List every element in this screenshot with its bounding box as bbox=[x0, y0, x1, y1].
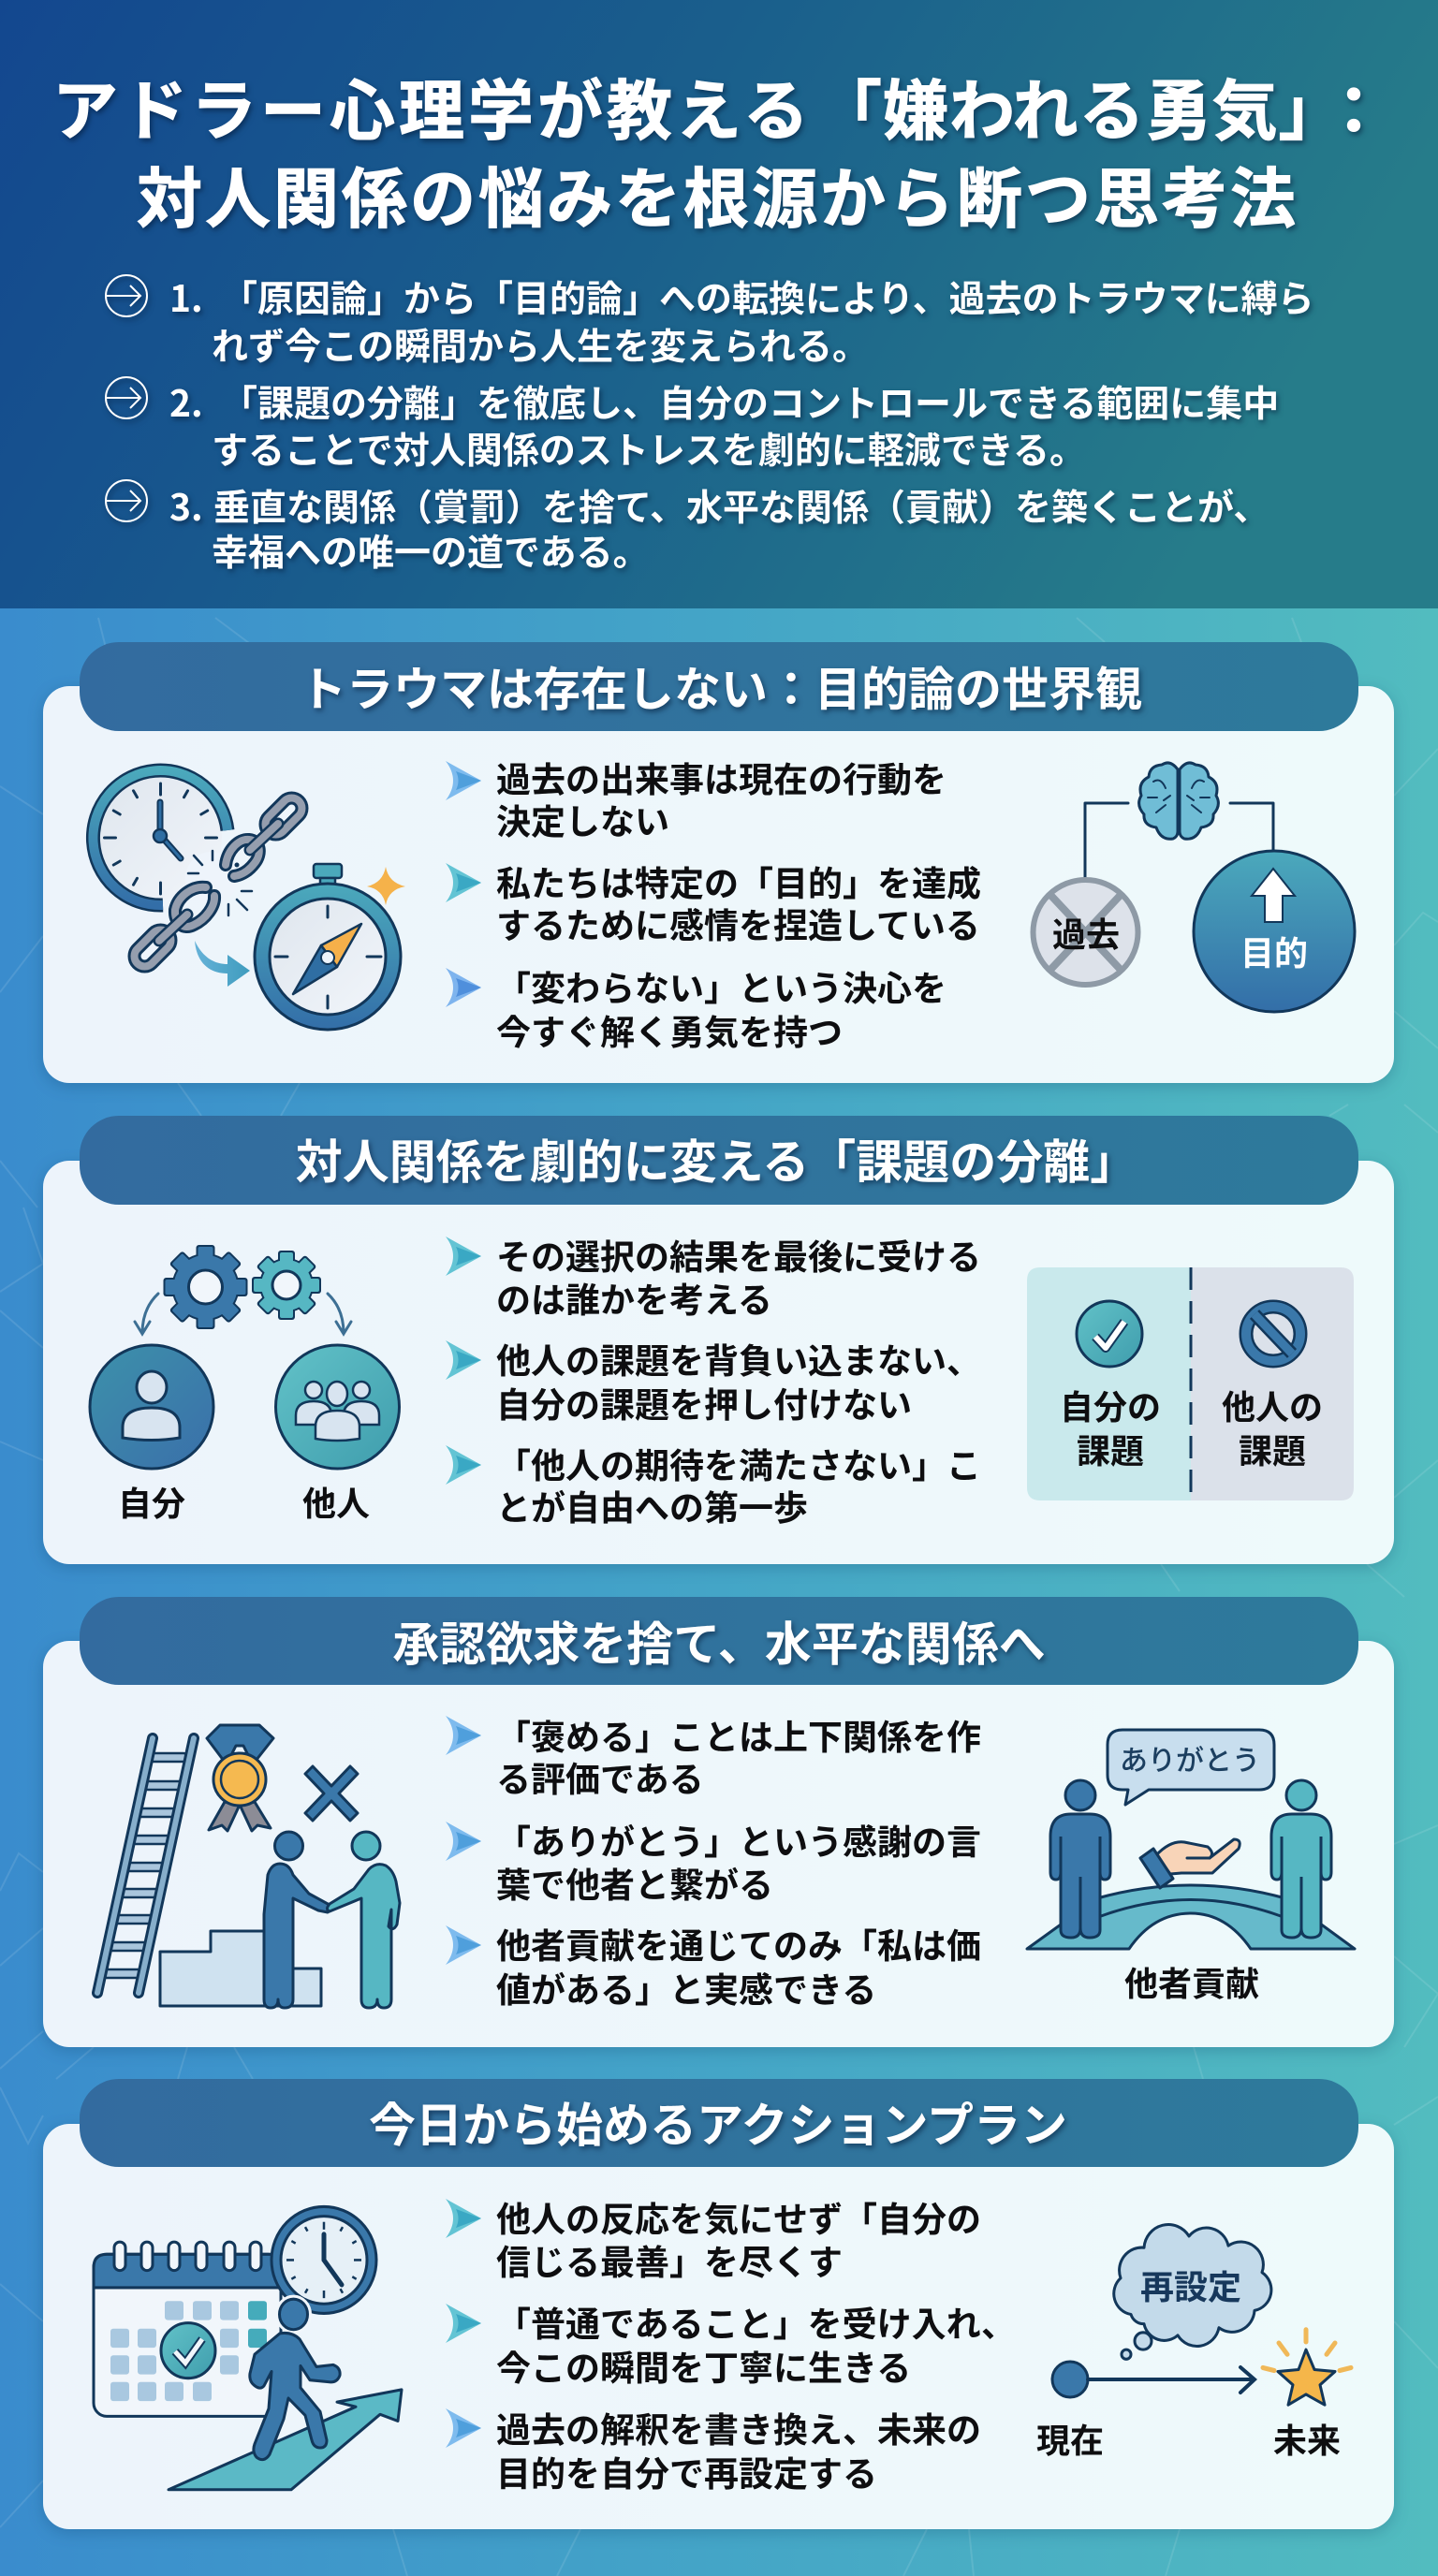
diagram: my task vs others: 自分の bbox=[1060, 1381, 1161, 1429]
title: 対人関係の悩みを根源から断つ思考法 bbox=[137, 147, 1299, 242]
bullet 3: とが自由への第一歩 bbox=[496, 1480, 808, 1530]
bullet 2: 今この瞬間を丁寧に生きる bbox=[496, 2340, 911, 2391]
key point 2: 「課題の分離」を徹底し、自分のコントロールできる範囲に集中 bbox=[221, 375, 1279, 428]
speech bubble bbox=[1108, 1730, 1274, 1805]
person left bbox=[1050, 1780, 1110, 1938]
heading bbox=[80, 642, 1358, 731]
bullet 1 bbox=[446, 2191, 981, 2285]
bullet 3 bbox=[446, 960, 946, 1055]
icon: clock chain compass bbox=[93, 770, 405, 1030]
diagram: present to future bbox=[1036, 2225, 1351, 2463]
title bbox=[52, 59, 1387, 242]
icon: gears and people bbox=[90, 1245, 399, 1526]
bullet 3: 「変わらない」という決心を bbox=[496, 960, 946, 1011]
key point 2 bbox=[106, 375, 1279, 475]
medal bbox=[207, 1725, 273, 1831]
steps bbox=[160, 1931, 321, 2006]
diagram: contribution: 他者貢献 bbox=[1124, 1957, 1259, 2006]
bullet 2 bbox=[446, 1814, 981, 1908]
bullet 2 bbox=[446, 856, 981, 948]
bullet 2: 葉で他者と繋がる bbox=[496, 1857, 773, 1908]
icon: ladder medal handshake bbox=[97, 1725, 400, 2008]
diagram: my task vs others bbox=[1027, 1267, 1354, 1500]
speech bubble: ありがとう bbox=[1120, 1737, 1260, 1778]
bullet 1: る評価である bbox=[496, 1751, 704, 1802]
cross mark bbox=[305, 1766, 358, 1821]
bullet 1 bbox=[446, 1709, 981, 1802]
bullet 1 bbox=[446, 752, 946, 844]
title: 「嫌われる勇気」 bbox=[816, 59, 1344, 154]
bullet 3: 過去の解釈を書き換え、未来の bbox=[496, 2402, 981, 2452]
heading bbox=[80, 1597, 1358, 1685]
bullet 3: 他者貢献を通じてのみ「私は価 bbox=[496, 1918, 981, 1969]
past circle bbox=[1034, 880, 1138, 985]
diagram: my task vs others: 課題 bbox=[1239, 1425, 1306, 1473]
bullet 3: 今すぐ解く勇気を持つ bbox=[496, 1004, 843, 1055]
bullet 3 bbox=[446, 1438, 981, 1530]
key point 2: することで対人関係のストレスを劇的に軽減できる。 bbox=[212, 422, 1086, 475]
panel: action plan bbox=[43, 2079, 1394, 2529]
icon: check bbox=[1077, 1301, 1142, 1367]
bullet 2: 私たちは特定の「目的」を達成 bbox=[496, 856, 981, 906]
bullet 1 bbox=[446, 1229, 981, 1323]
key point 3: 垂直な関係（賞罰）を捨て、水平な関係（貢献）を築くことが、 bbox=[213, 479, 1269, 532]
key point 1 bbox=[106, 271, 1314, 371]
diagram: contribution bbox=[1027, 1730, 1355, 2006]
past circle: 過去 bbox=[1052, 908, 1120, 957]
calendar bbox=[94, 2242, 281, 2416]
bridge bbox=[1027, 1885, 1355, 1949]
bullet 2: するために感情を捏造している bbox=[496, 898, 980, 948]
chain bbox=[130, 794, 306, 971]
bullet 1: その選択の結果を最後に受ける bbox=[496, 1229, 981, 1280]
key point 1: 「原因論」から「目的論」への転換により、過去のトラウマに縛ら bbox=[221, 271, 1314, 323]
bullet 3 bbox=[446, 2402, 981, 2496]
bullet 1: 過去の出来事は現在の行動を bbox=[496, 752, 946, 802]
heading bbox=[80, 1116, 1358, 1205]
bullet 1: 「褒める」ことは上下関係を作 bbox=[496, 1709, 981, 1760]
header band bbox=[0, 0, 1438, 608]
panel: separation of tasks bbox=[43, 1116, 1394, 1564]
person right bbox=[1271, 1780, 1331, 1938]
title: アドラー心理学が教える bbox=[52, 59, 813, 154]
bullet 1: 決定しない bbox=[496, 794, 669, 844]
icon: calendar clock walker bbox=[94, 2206, 402, 2490]
ladder bbox=[97, 1738, 194, 1993]
diagram: my task vs others: 課題 bbox=[1077, 1425, 1144, 1473]
icon: brain bbox=[1139, 763, 1218, 839]
key point 2: 2. bbox=[169, 375, 203, 428]
purpose circle: 目的 bbox=[1240, 927, 1308, 975]
bullet 3: 「他人の期待を満たさない」こ bbox=[496, 1438, 981, 1488]
diagram: past vs purpose bbox=[1034, 763, 1355, 1012]
panel: horizontal relationships bbox=[43, 1597, 1394, 2047]
thought cloud: 再設定 bbox=[1140, 2261, 1241, 2309]
clock bbox=[271, 2206, 376, 2313]
bullet 3: 目的を自分で再設定する bbox=[496, 2446, 877, 2496]
key point 3: 3. bbox=[169, 479, 203, 532]
hand bbox=[1140, 1839, 1240, 1888]
heading: 対人関係を劇的に変える「課題の分離」 bbox=[296, 1125, 1137, 1193]
bullet 1: 信じる最善」を尽くす bbox=[496, 2234, 843, 2285]
title: ： bbox=[1321, 59, 1387, 154]
bullet 3 bbox=[446, 1918, 981, 2012]
heading: 今日から始めるアクションプラン bbox=[369, 2088, 1067, 2156]
bullet 2: 他人の課題を背負い込まない、 bbox=[496, 1333, 981, 1383]
key point 3 bbox=[106, 479, 1269, 577]
panel: trauma bbox=[43, 642, 1394, 1083]
bullet 1: 他人の反応を気にせず「自分の bbox=[496, 2191, 981, 2242]
lower background bbox=[0, 599, 1438, 2576]
walking person bbox=[250, 2297, 340, 2460]
key point 1: れず今この瞬間から人生を変えられる。 bbox=[212, 318, 869, 371]
icon: gears and people: 自分 bbox=[118, 1477, 185, 1526]
self circle bbox=[90, 1345, 213, 1469]
thought cloud bbox=[1114, 2225, 1271, 2359]
heading: トラウマは存在しない：目的論の世界観 bbox=[300, 652, 1142, 720]
key point 3: 幸福への唯一の道である。 bbox=[212, 524, 650, 577]
bullet 3: 値がある」と実感できる bbox=[496, 1962, 876, 2012]
bullet 1: のは誰かを考える bbox=[496, 1272, 772, 1323]
icon: gears and people: 他人 bbox=[302, 1477, 370, 1526]
star bbox=[1263, 2330, 1351, 2405]
others circle bbox=[275, 1345, 399, 1469]
bullet 2: 自分の課題を押し付けない bbox=[496, 1377, 912, 1427]
person left bbox=[264, 1832, 330, 2008]
heading: 承認欲求を捨て、水平な関係へ bbox=[392, 1607, 1046, 1675]
key point 1: 1. bbox=[169, 271, 203, 323]
purpose circle bbox=[1194, 851, 1355, 1012]
diagram: present to future: 現在 bbox=[1036, 2414, 1104, 2463]
growth arrow bbox=[169, 2390, 402, 2490]
bullet 2 bbox=[446, 1333, 981, 1427]
heading bbox=[80, 2079, 1358, 2167]
diagram: my task vs others: 他人の bbox=[1222, 1381, 1323, 1429]
bullet 2 bbox=[446, 2296, 1016, 2391]
diagram: present to future: 未来 bbox=[1273, 2414, 1341, 2463]
bullet 2: 「ありがとう」という感謝の言 bbox=[496, 1814, 981, 1865]
person right bbox=[328, 1832, 400, 2008]
bullet 2: 「普通であること」を受け入れ、 bbox=[496, 2296, 1016, 2347]
icon: prohibited bbox=[1246, 1307, 1300, 1361]
